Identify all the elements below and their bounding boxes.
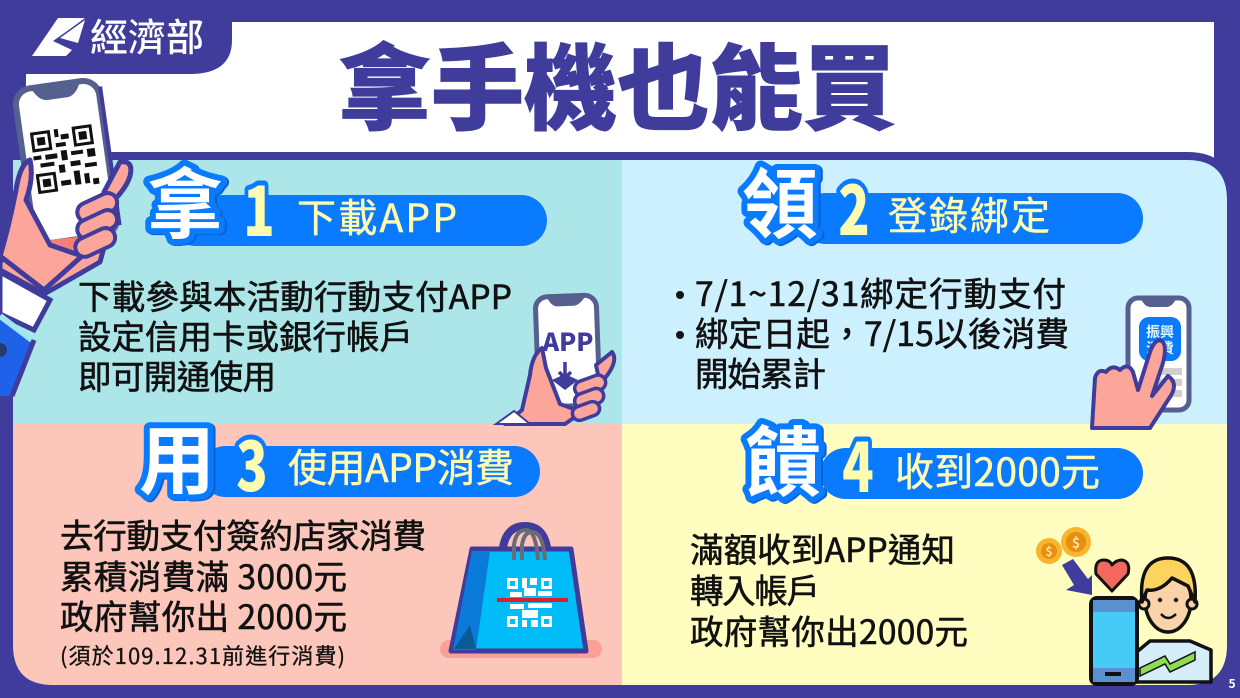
panel: step 2 background	[622, 160, 1227, 424]
step 1 heading	[147, 144, 547, 256]
icon: shopping bag with QR code	[440, 526, 602, 658]
icon: hand holding phone with APP	[496, 295, 614, 424]
icon: person with phone and coins: $	[1045, 543, 1053, 560]
icon: finger tapping phone: 振興	[1146, 322, 1174, 342]
step 3 text: 累積消費滿 3000元	[60, 550, 347, 599]
step 2 heading: 登錄綁定	[888, 186, 1050, 242]
step 3 text: 去行動支付簽約店家消費	[60, 509, 426, 558]
step 3 heading: 3	[236, 413, 268, 511]
step 2 heading: 領	[744, 145, 820, 255]
step 2 text: 綁定日起，7/15以後消費	[695, 307, 1069, 356]
logo: ministry badge	[32, 7, 204, 62]
icon: finger tapping phone	[1092, 298, 1189, 428]
step 2 text: 開始累計	[695, 347, 826, 396]
step 3 text: 政府幫你出 2000元	[60, 590, 347, 639]
step 1 text: 下載參與本活動行動支付APP	[78, 270, 512, 319]
step 4 heading	[745, 402, 1143, 513]
logo: ministry badge: 經濟部	[90, 7, 204, 62]
step 4 text: 滿額收到APP通知	[690, 523, 955, 572]
step 2 heading: 2	[838, 157, 870, 255]
step 1 heading: 拿	[149, 145, 225, 255]
step 4 text: 政府幫你出2000元	[690, 605, 968, 654]
panel: step 3 background	[13, 424, 622, 685]
title: 拿手機也能買	[338, 14, 896, 149]
step 4 heading: 收到2000元	[895, 442, 1100, 498]
step 3 text	[60, 509, 426, 671]
step 3 heading	[139, 400, 540, 511]
panel: step 4 background	[622, 424, 1227, 685]
step 1 heading: 拿	[147, 144, 223, 254]
icon: hand holding phone with QR code	[0, 79, 131, 396]
step 2 text	[676, 267, 1069, 396]
step 2 heading	[742, 144, 1143, 255]
icon: person with phone and coins	[1036, 527, 1211, 684]
step 1 heading: 1	[243, 158, 275, 256]
step 1 text: 設定信用卡或銀行帳戶	[78, 310, 413, 359]
step 1 text: 即可開通使用	[78, 350, 276, 399]
step 4 heading: 饋	[747, 403, 823, 513]
step 1 heading: 下載APP	[297, 188, 457, 244]
panels frame	[0, 152, 1234, 698]
step 2 heading: 領	[742, 144, 818, 254]
icon: person with phone and coins: $	[1072, 533, 1080, 553]
step 1 text	[78, 270, 512, 399]
icon: hand holding phone with APP: APP	[542, 323, 593, 359]
step 3 heading: 使用APP消費	[288, 438, 514, 494]
step 4 text	[690, 523, 968, 654]
page number: 5	[1228, 675, 1236, 692]
step 2 text: 7/1~12/31綁定行動支付	[695, 267, 1066, 316]
step 4 heading: 饋	[745, 402, 821, 512]
icon: finger tapping phone: 消費	[1146, 338, 1174, 358]
step 3 heading: 用	[139, 400, 215, 510]
step 4 text: 轉入帳戶	[690, 564, 820, 613]
header white band	[26, 22, 1214, 170]
step 3 heading: 用	[141, 401, 217, 511]
step 3 text: (須於109.12.31前進行消費)	[60, 639, 345, 671]
step 4 heading: 4	[842, 414, 874, 512]
panel: step 1 background	[13, 160, 622, 424]
